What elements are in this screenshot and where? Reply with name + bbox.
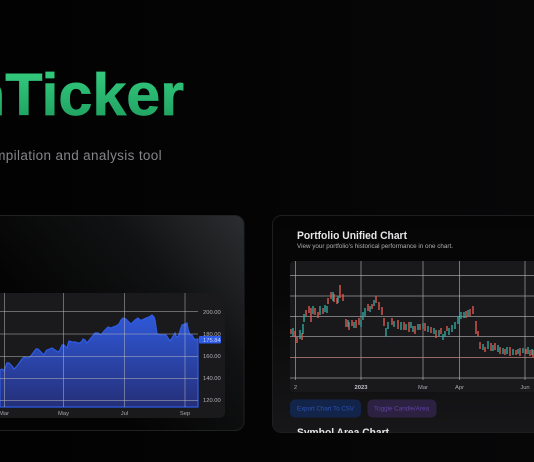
card description: View your portfolio's historical performance in one chart. bbox=[297, 243, 453, 250]
panel: right chart card bbox=[272, 216, 534, 439]
grid lines bbox=[290, 261, 534, 380]
area chart bbox=[0, 293, 225, 418]
x axis labels: Apr bbox=[455, 385, 464, 391]
candles: rising bbox=[293, 292, 532, 355]
button: export chart to csv: Export Chart To CSV bbox=[297, 406, 355, 412]
last price tag: 175.84 bbox=[203, 338, 222, 344]
x axis labels: Sep bbox=[180, 411, 190, 417]
y axis labels: 140.00 bbox=[203, 376, 221, 382]
clipped section heading: Symbol Area Chart bbox=[297, 427, 389, 439]
last price tag bbox=[199, 336, 222, 344]
x axis labels: Jun bbox=[520, 385, 530, 391]
y axis labels: 180.00 bbox=[203, 332, 221, 338]
x axis labels: Jul bbox=[121, 411, 128, 417]
x axis labels bbox=[0, 411, 190, 417]
x axis labels: Mar bbox=[418, 385, 428, 391]
area series bbox=[0, 315, 198, 407]
candlestick chart bbox=[290, 261, 534, 392]
button: toggle candle/area bbox=[368, 400, 436, 418]
y axis labels: 200.00 bbox=[203, 310, 221, 316]
card heading: Portfolio Unified Chart bbox=[297, 230, 407, 242]
y axis labels bbox=[203, 310, 221, 404]
y axis labels: 120.00 bbox=[203, 398, 221, 404]
x axis labels bbox=[294, 385, 530, 391]
price line bbox=[290, 356, 534, 358]
x axis labels: May bbox=[58, 411, 69, 417]
grid lines bbox=[0, 293, 198, 407]
panel: left chart card bbox=[0, 216, 244, 430]
y axis labels: 160.00 bbox=[203, 354, 221, 360]
x axis labels: 2 bbox=[294, 385, 297, 391]
button: export chart to csv bbox=[290, 400, 361, 418]
x axis labels: 2023 bbox=[355, 385, 368, 391]
button: toggle candle/area: Toggle Candle/Area bbox=[374, 406, 429, 412]
candles: falling bbox=[291, 285, 533, 357]
